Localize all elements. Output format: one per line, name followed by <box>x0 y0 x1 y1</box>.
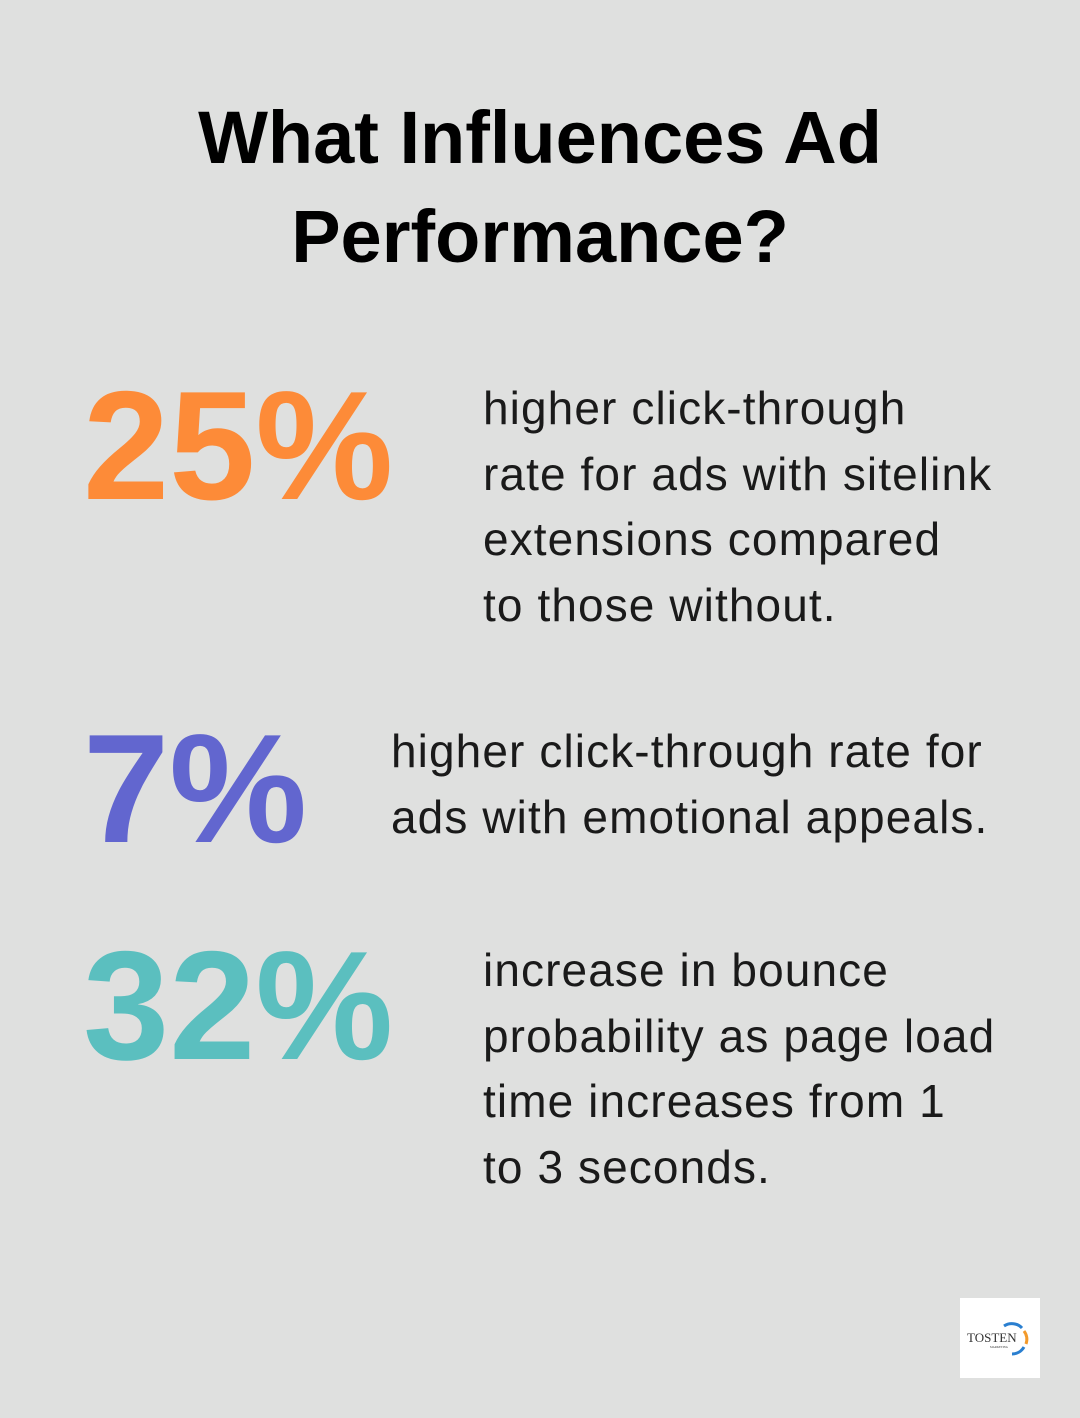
title: What Influences Ad <box>198 96 882 179</box>
text: 25% description: rate for ads with sitelink <box>483 448 992 500</box>
text: 7% description <box>391 725 988 842</box>
text: 7% description: higher click-through rate for <box>391 725 983 777</box>
text: 25% description: to those without. <box>483 578 837 630</box>
text: 32% description: time increases from 1 <box>483 1075 946 1127</box>
logo: Tosten Marketing <box>960 1298 1040 1378</box>
text: 7% description: ads with emotional appeals. <box>391 790 988 842</box>
title: Performance? <box>291 195 789 278</box>
stat: 25%: 25% <box>83 359 393 532</box>
text: 32% description: probability as page load <box>483 1010 995 1062</box>
text: 32% description <box>483 944 995 1192</box>
stat: 32%: 32% <box>83 919 393 1092</box>
title <box>198 96 882 278</box>
text: 32% description: to 3 seconds. <box>483 1140 771 1192</box>
logo: Tosten Marketing: TOSTEN <box>967 1330 1017 1345</box>
text: 32% description: increase in bounce <box>483 944 889 996</box>
logo: Tosten Marketing: MARKETING <box>990 1345 1009 1349</box>
text: 25% description: higher click-through <box>483 382 906 434</box>
text: 25% description: extensions compared <box>483 513 941 565</box>
stat: 7%: 7% <box>83 702 307 875</box>
text: 25% description <box>483 382 992 630</box>
